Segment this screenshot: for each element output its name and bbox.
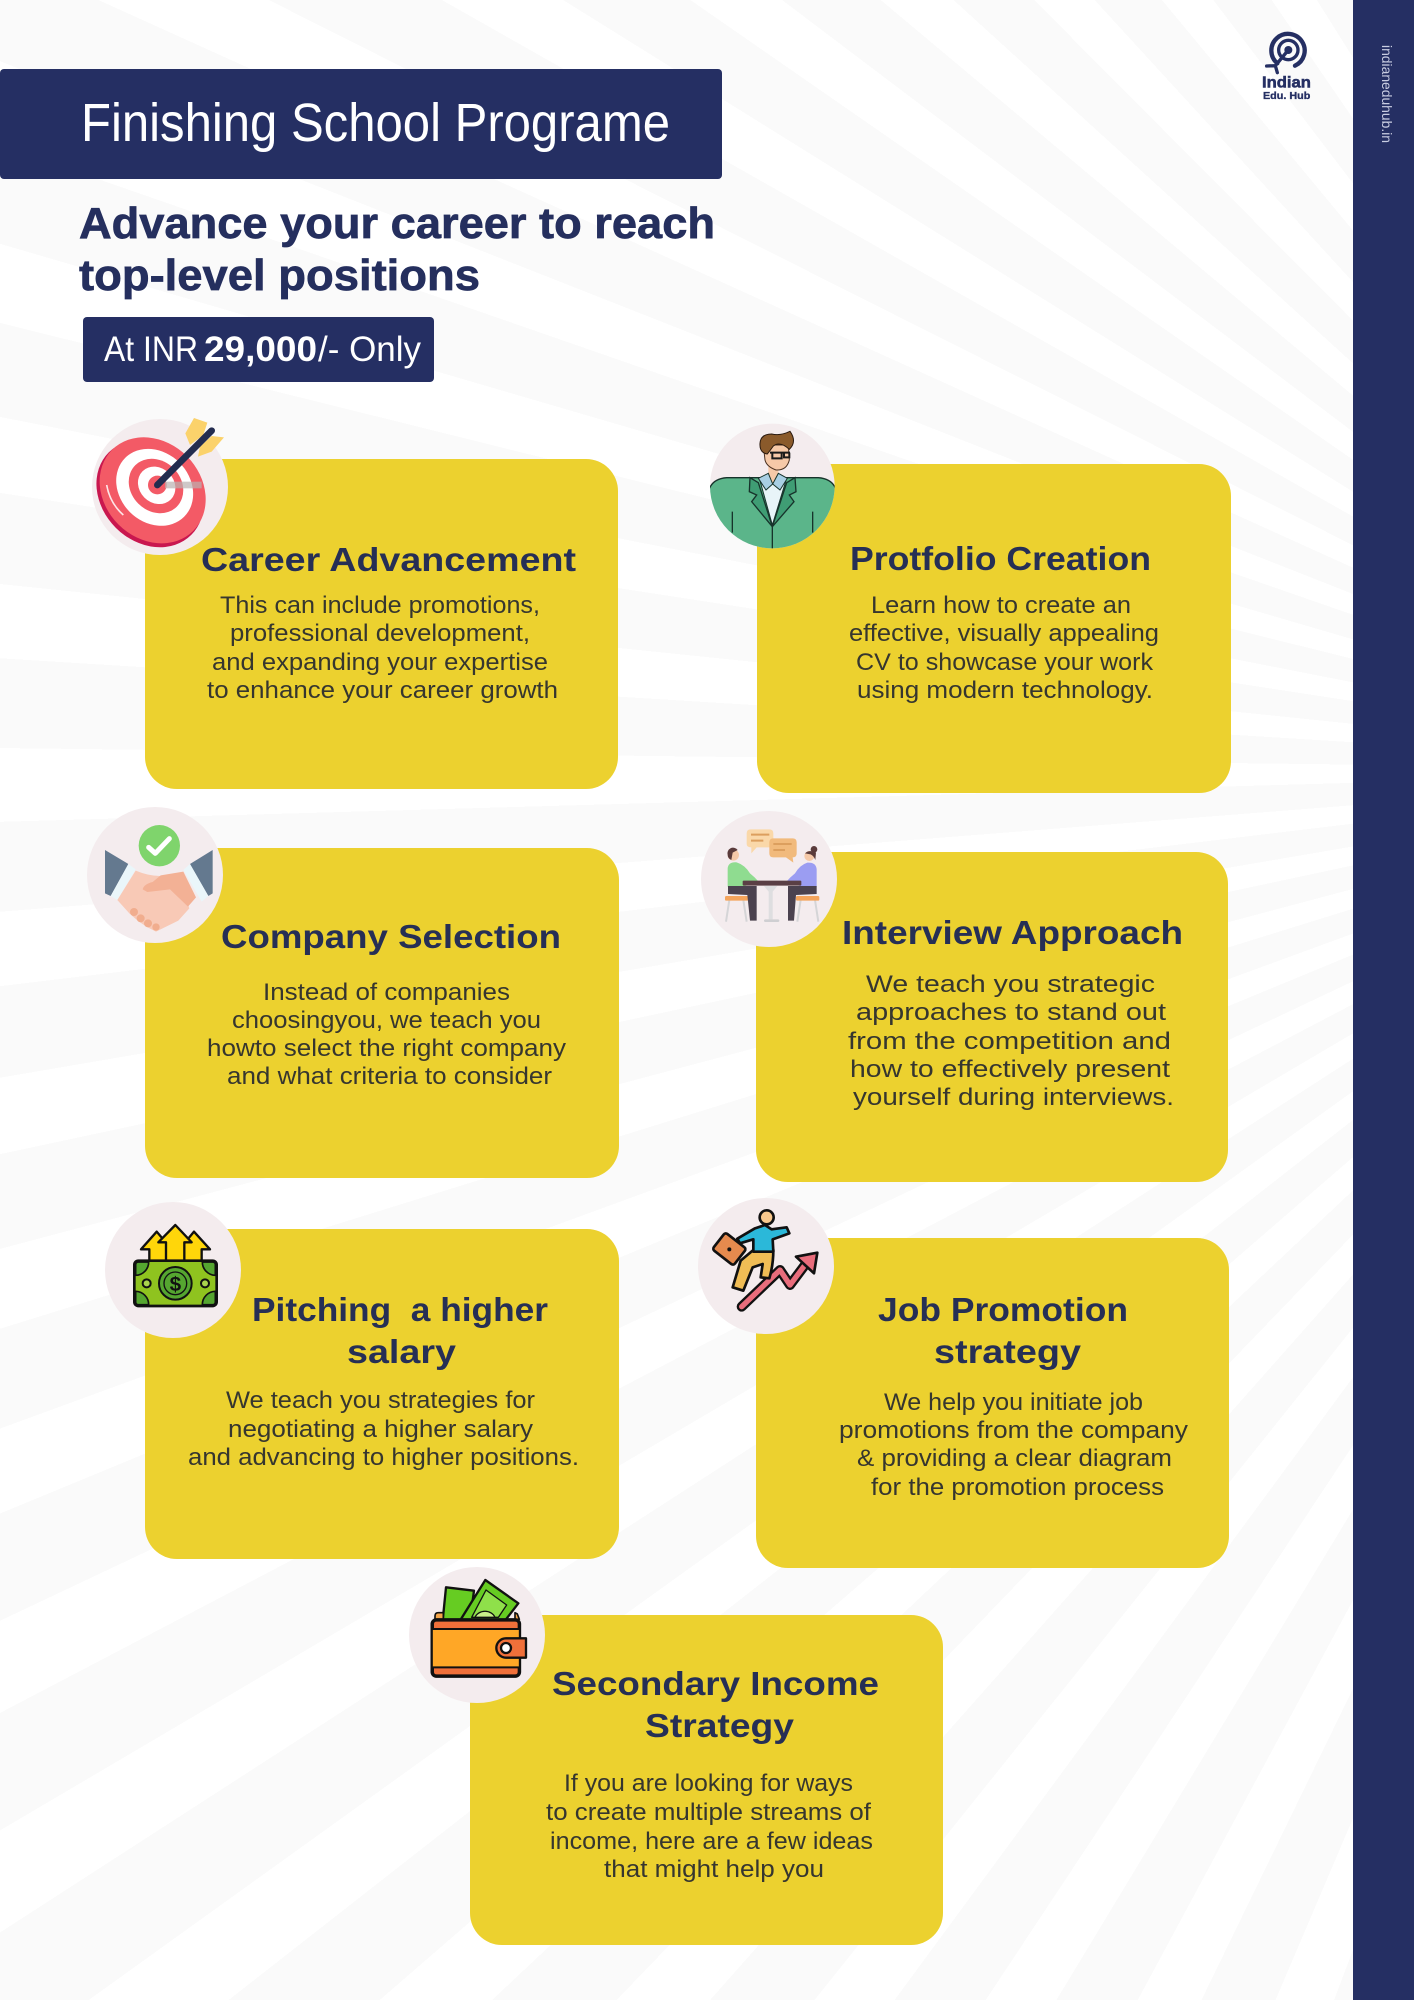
title banner: Finishing School Programe	[81, 93, 670, 153]
card body text: howto select the right company	[207, 1035, 567, 1062]
card body text	[849, 592, 1159, 704]
price badge: 29,000	[204, 330, 317, 369]
card body text: yourself during interviews.	[853, 1084, 1174, 1111]
card body text: that might help you	[604, 1856, 824, 1883]
icon: wallet with cash	[409, 1567, 545, 1703]
card heading: Company Selection	[221, 918, 561, 955]
price badge: At INR	[104, 330, 198, 369]
card body text: CV to showcase your work	[856, 649, 1154, 676]
card body text	[188, 1387, 579, 1471]
card heading	[552, 1665, 879, 1744]
card heading: Protfolio Creation	[850, 540, 1151, 577]
card body text: This can include promotions,	[220, 592, 540, 619]
card body text: professional development,	[230, 620, 530, 647]
card heading: Career Advancement	[201, 541, 576, 578]
icon: two people at table	[701, 811, 837, 947]
card body text: using modern technology.	[857, 677, 1153, 704]
sidebar: website strip	[1353, 0, 1414, 2000]
card body text: Instead of companies	[263, 979, 510, 1006]
card body text: & providing a clear diagram	[857, 1445, 1172, 1472]
card heading: Job Promotion	[878, 1291, 1128, 1328]
card heading	[252, 1291, 548, 1370]
card body text	[207, 979, 567, 1090]
subtitle heading: Advance your career to reach	[79, 199, 715, 248]
title banner	[0, 69, 722, 179]
icon: target with arrow	[75, 416, 228, 569]
card body text: and what criteria to consider	[227, 1063, 552, 1090]
card body text: and advancing to higher positions.	[188, 1444, 579, 1471]
card body text	[848, 971, 1174, 1111]
card body text: income, here are a few ideas	[550, 1828, 873, 1855]
icon: handshake with check	[87, 807, 223, 943]
card body text: from the competition and	[848, 1028, 1171, 1055]
panel: company selection	[87, 807, 619, 1178]
subtitle heading	[79, 199, 715, 300]
sidebar: website strip: indianeduhub.in	[1379, 45, 1394, 143]
card body text	[207, 592, 558, 704]
card body text: Learn how to create an	[871, 592, 1131, 619]
card body text: for the promotion process	[871, 1474, 1164, 1501]
card body text	[839, 1389, 1189, 1501]
card body text: If you are looking for ways	[564, 1770, 853, 1797]
card body text: effective, visually appealing	[849, 620, 1159, 647]
card body text: to create multiple streams of	[546, 1799, 871, 1826]
card heading: strategy	[934, 1333, 1082, 1370]
price badge: /- Only	[318, 330, 421, 369]
card body text: We help you initiate job	[884, 1389, 1143, 1416]
panel: interview approach	[701, 811, 1228, 1182]
price badge	[83, 317, 434, 382]
logo: Indian Edu. Hub	[1262, 34, 1311, 102]
icon: banknote with arrows: $	[170, 1273, 182, 1296]
panel: portfolio creation	[708, 424, 1231, 793]
card heading: Pitching a higher	[252, 1291, 548, 1328]
logo: Indian Edu. Hub: Edu. Hub	[1263, 91, 1310, 102]
card body text: approaches to stand out	[856, 999, 1166, 1026]
card body text	[546, 1770, 873, 1883]
card body text: We teach you strategies for	[226, 1387, 535, 1414]
subtitle heading: top-level positions	[79, 251, 480, 300]
card body text: how to effectively present	[850, 1056, 1170, 1083]
card heading	[878, 1291, 1128, 1370]
icon: banknote with arrows	[105, 1202, 241, 1338]
panel: secondary income strategy	[409, 1567, 943, 1945]
card body text: and expanding your expertise	[212, 649, 548, 676]
panel: job promotion strategy	[698, 1198, 1229, 1568]
card heading: salary	[347, 1333, 457, 1370]
panel: career advancement	[75, 416, 618, 789]
card body text: promotions from the company	[839, 1417, 1189, 1444]
card body text: to enhance your career growth	[207, 677, 558, 704]
card heading: Interview Approach	[842, 914, 1183, 951]
icon: man in green suit	[708, 424, 837, 550]
card body text: We teach you strategic	[866, 971, 1155, 998]
icon: climbing businessman	[698, 1198, 834, 1334]
card body text: negotiating a higher salary	[228, 1416, 534, 1443]
card body text: choosingyou, we teach you	[232, 1007, 541, 1034]
logo: Indian Edu. Hub: Indian	[1262, 74, 1311, 91]
card heading: Strategy	[645, 1707, 795, 1744]
card heading: Secondary Income	[552, 1665, 879, 1702]
panel: pitching a higher salary	[105, 1202, 619, 1559]
